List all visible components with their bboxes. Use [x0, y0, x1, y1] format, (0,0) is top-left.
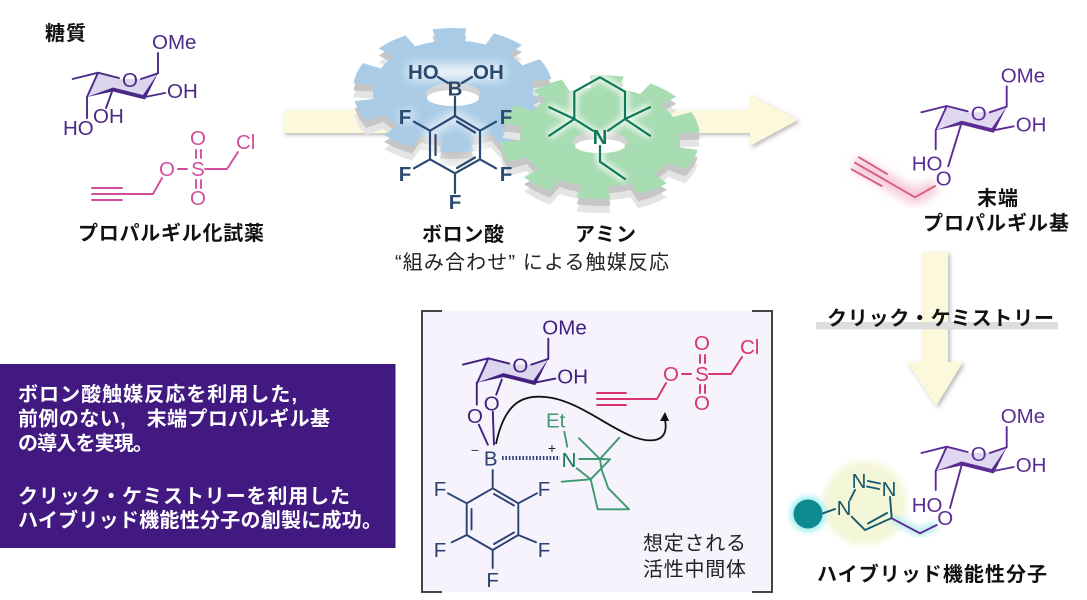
triazole [823, 470, 896, 530]
summary text: ボロン酸触媒反応を利用した, [18, 383, 297, 406]
caption: proposed active intermediate: 想定される [643, 532, 746, 555]
boronic acid structure: F [449, 191, 461, 214]
sugar molecule: OH [167, 80, 198, 103]
boronate aryl: F [434, 539, 446, 562]
amine structure [549, 77, 650, 179]
panel: summary [0, 364, 396, 548]
sugar molecule [63, 31, 198, 140]
caption: proposed active intermediate [643, 532, 746, 581]
boronate aryl: F [538, 539, 550, 562]
boronate aryl: F [538, 478, 550, 501]
sugar in intermediate: OMe [542, 317, 587, 340]
gear: amine [496, 72, 704, 216]
sugar ring [912, 64, 1046, 190]
label: terminal propargyl group line 2: プロパルギル基 [923, 212, 1069, 235]
sugar in intermediate: O [467, 405, 483, 428]
sugar molecule: O [122, 69, 138, 92]
sugar in intermediate: OH [557, 366, 588, 389]
boronate aryl: F [434, 478, 446, 501]
reagent in intermediate: S [695, 363, 709, 386]
linker glow [892, 518, 937, 533]
boronic acid structure: OH [473, 61, 504, 84]
sugar ring: O [936, 167, 952, 190]
triazole: N [852, 470, 866, 493]
triazole: N [882, 478, 896, 501]
main horizontal arrow [283, 95, 798, 146]
ammonium: + [548, 440, 556, 456]
vertical arrow [907, 252, 963, 406]
boronate aryl: − [471, 442, 479, 458]
glow: alkyne [855, 163, 935, 197]
summary text: クリック・ケミストリーを利用した [18, 485, 350, 508]
ammonium: N [562, 449, 576, 472]
propargylating reagent: S [191, 158, 205, 181]
sugar: O [937, 507, 953, 530]
panel: active intermediate [422, 311, 772, 592]
boronic acid structure: F [399, 163, 411, 186]
sugar molecule: OMe [152, 31, 196, 54]
label: boronic acid: ボロン酸 [422, 223, 504, 246]
propargylating reagent: O [190, 187, 206, 210]
reagent in intermediate: O [663, 363, 679, 386]
sugar molecule: HO [63, 117, 94, 140]
sugar ring: O [971, 102, 987, 125]
sugar ring: OH [1016, 113, 1046, 136]
label: hybrid functional molecule: ハイブリッド機能性分子 [817, 562, 1047, 586]
teal ball [794, 500, 822, 528]
label: propargylating reagent: プロパルギル化試薬 [78, 222, 264, 245]
sugar in intermediate: O [512, 355, 528, 378]
reagent in intermediate: O [694, 392, 710, 415]
ammonium: Et [546, 410, 566, 433]
triazole: N [837, 497, 851, 520]
boronic acid structure [399, 61, 512, 214]
alkyne chain [852, 157, 935, 197]
teal ball glow [790, 496, 826, 532]
boronic acid structure: F [399, 106, 411, 129]
sugar ring: HO [912, 152, 942, 175]
boronate aryl: B [484, 448, 498, 470]
summary text [18, 383, 382, 532]
ammonium [546, 410, 629, 509]
summary text: の導入を実現。 [18, 431, 153, 455]
product: terminal propargyl sugar [852, 64, 1046, 197]
sugar: OMe [1001, 405, 1045, 428]
label: sugar: 糖質 [45, 22, 86, 45]
sugar ring: OMe [1001, 64, 1045, 87]
band: click chemistry [816, 322, 1058, 330]
sugar: O [971, 443, 987, 466]
brackets [422, 311, 772, 592]
sugar molecule: OH [93, 105, 124, 128]
linker bond [892, 518, 937, 533]
label: click chemistry: クリック・ケミストリー [827, 307, 1054, 330]
sugar: OH [1016, 454, 1046, 477]
propargylating reagent [92, 127, 255, 210]
propargylating reagent: O [190, 127, 206, 150]
caption: proposed active intermediate: 活性中間体 [643, 558, 746, 581]
summary text: ハイブリッド機能性分子の創製に成功。 [18, 508, 382, 532]
boronic acid structure: F [500, 106, 512, 129]
propargylating reagent: Cl [236, 131, 255, 154]
sugar [912, 405, 1046, 530]
boronic acid structure: B [448, 78, 462, 100]
sugar in intermediate: O [484, 393, 500, 416]
sugar: HO [912, 494, 942, 517]
boronate aryl: F [486, 569, 499, 592]
curved arrow [496, 397, 669, 444]
label: terminal propargyl group: 末端 [977, 187, 1018, 210]
reagent in intermediate: Cl [740, 336, 759, 359]
label: amine: アミン [575, 224, 636, 246]
amine structure: N [593, 126, 607, 149]
reagent in intermediate [597, 332, 759, 415]
gear: boronic acid [356, 30, 550, 180]
summary text: 前例のない, 末端プロパルギル基 [18, 408, 330, 430]
boronic acid structure: HO [408, 61, 439, 84]
boronic acid structure: F [500, 163, 512, 186]
propargylating reagent: O [159, 158, 175, 181]
reagent in intermediate: O [694, 332, 710, 355]
sugar in intermediate [463, 317, 588, 445]
hybrid functional molecule [790, 405, 1046, 545]
highlight disc [823, 461, 907, 545]
boronate aryl [434, 442, 560, 592]
caption: combination catalysis: “組み合わせ” による触媒反応 [395, 251, 669, 274]
